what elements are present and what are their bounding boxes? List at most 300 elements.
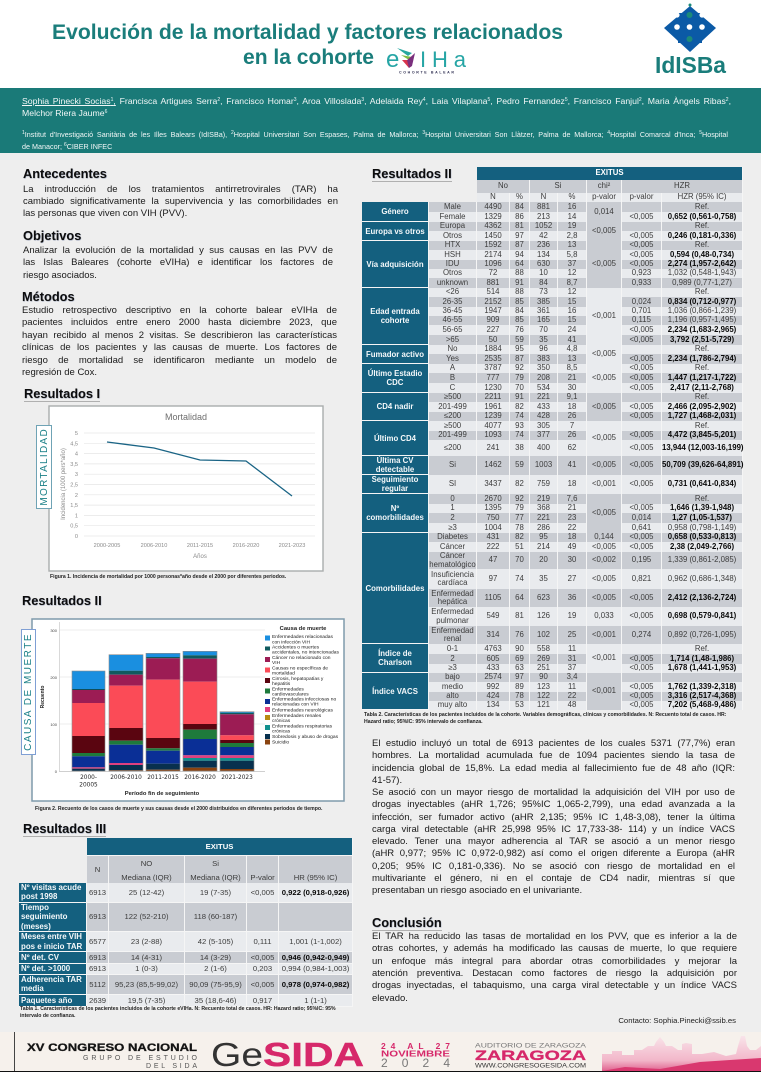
table: resultados II exitus: <0,005 [629,250,654,259]
text: objetivos: riesgo asociados. [23,270,97,281]
table: resultados II exitus: CD4 nadir [377,402,413,411]
x axis labels [94,543,305,560]
table: resultados II exitus: Female [440,212,466,221]
y axis ticks: 300 [50,628,58,633]
side label: mortalidad [36,425,52,509]
text: métodos: pacientes incluidos entre enero 2000 hasta diciembre 2023, que [22,317,337,328]
table: resultados II exitus: 1,036 (0,866-1,239) [668,306,736,315]
table: resultados II exitus: pulmonar [436,616,469,624]
table: resultados II exitus: 50,709 (39,626-64,891) [662,460,744,469]
y axis labels: 4,5 [70,441,78,447]
table: resultados II exitus: 2152 [484,297,502,306]
x axis labels: 2016-2020 [233,543,259,549]
table: resultados II exitus: 74 [515,411,524,420]
text: conclusión: drogas inyectadas, el tabaquismo, una carga viral detectable y un índice VACS [372,980,737,991]
table: resultados II exitus: p-valor [630,192,653,201]
table: resultados II exitus: Vía adquisición [366,260,424,268]
table: resultados II exitus: regular [382,484,408,493]
table: resultados II exitus: 82 [515,532,524,541]
table: resultados II exitus: 10 [539,268,548,277]
table: resultados III exitus: 6913 [89,964,106,973]
table: resultados II exitus: Europa [440,221,465,230]
table: resultados II exitus: 0-1 [447,644,458,653]
table: resultados III exitus: 2639 [89,996,106,1005]
table: resultados III exitus: 90,09 (75-95,9) [189,980,242,989]
table: resultados II exitus: 236 [537,240,550,249]
table: resultados III exitus: P-valor [250,873,275,882]
table: resultados II exitus: 222 [486,542,500,551]
text: métodos: regresión de Cox. [22,367,97,378]
table: resultados III exitus [19,838,352,1006]
table: resultados II exitus: 49 [568,542,576,551]
table: resultados II exitus: 1003 [535,460,552,469]
table: resultados II exitus: 165 [537,315,550,324]
table: resultados II exitus: 3787 [484,363,502,372]
table: resultados II exitus: <0,005 [629,430,654,439]
table: resultados II exitus: 549 [486,611,500,620]
table: resultados II exitus: 85 [515,315,524,324]
text: conclusión: un enfoque más integral para abordar otras comorbilidades y mejorar la [372,956,737,967]
table: resultados II exitus: <0,005 [629,240,654,249]
table: resultados II exitus: 13 [568,354,576,363]
congress date: 2024 [381,1056,450,1070]
authors and affiliations band [0,88,761,153]
table: resultados II exitus: 1 [450,503,455,512]
table: resultados II exitus: bajo [445,672,460,681]
table: resultados II exitus: 81 [515,221,524,230]
table: resultados II exitus: 881 [486,278,500,287]
congress name [27,1042,198,1070]
x axis labels: 20005 [79,782,98,788]
table: resultados III exitus: <0,005 [251,953,274,962]
bar: 2006-2010 [109,655,143,771]
table: resultados II exitus: <0,005 [629,373,654,382]
table: resultados II exitus: <0,005 [629,700,654,709]
y axis ticks: 0 [55,769,58,774]
table: resultados II exitus: 4763 [484,644,502,653]
y axis labels [70,431,78,540]
table: resultados II exitus: <0,005 [629,691,654,700]
table: resultados II exitus: 0,731 (0,641-0,834) [668,479,736,488]
table: resultados II exitus: 759 [537,479,550,488]
line chart: mortalidad [48,405,324,572]
table: resultados III exitus: Paquetes año [21,996,72,1005]
table: resultados III exitus: Adherencia TAR [21,975,82,984]
legend: Enfermedades neurológicas [272,708,333,714]
data line [107,442,292,496]
table: resultados III exitus: 25 (12-42) [129,888,164,897]
table: resultados II exitus: 27 [568,574,576,583]
table: resultados II exitus: 0,892 (0,726-1,095) [668,630,736,639]
table: resultados II exitus: 35 [539,335,548,344]
table: resultados II exitus: 50 [489,335,497,344]
table: resultados II exitus: 89 [515,682,524,691]
table: resultados II exitus: 18 [568,479,576,488]
contact: Contacto: Sophia.Pinecki@ssib.es [618,1016,736,1025]
table: resultados II exitus: 2 [450,654,455,663]
table: resultados II exitus: 47 [489,555,497,564]
table: resultados II exitus: ≤200 [444,411,461,420]
text: conclusión: otras cohortes, y además ha modificado las causas de muerte, lo que requiere [372,943,737,954]
table: resultados II exitus: 41 [568,460,576,469]
table: resultados II exitus: N [541,192,546,201]
x axis labels: Años [193,554,207,560]
table: resultados II exitus: 92 [515,363,524,372]
text: resultados: Se asoció con un mayor riesgo de mortalidad la adquisición del VIH por uso de [372,787,735,798]
congress venue: WWW.CONGRESOGESIDA.COM [475,1062,586,1070]
table: resultados II exitus: Yes [446,354,459,363]
table: resultados II exitus: <0,001 [592,311,616,320]
table: resultados II exitus: 305 [537,421,550,430]
table: resultados II exitus: 213 [537,212,550,221]
caption: tabla 2 [364,712,726,725]
table: resultados II exitus: 0,014 [632,513,651,522]
table: resultados II exitus: HSH [444,250,461,259]
table: resultados II exitus: 36 [568,593,576,602]
text: antecedentes: cambiado significativamente la supervivencia y las comorbilidades en [23,196,338,207]
table: resultados II exitus: Ref. [695,363,709,372]
table: resultados II exitus: HZR (95% IC) [678,192,727,201]
affiliations: 1Institut d'Investigació Sanitària de les Illes Balears (IdISBa), 2Hospital Universitari Son Espases, Palma de Mallorca; 3Hospital Universitari Son Llàtzer, Palma de Mallorca; 4Hospital Comarcal d'Inca; 5Hospital [22,130,728,139]
table: resultados III exitus: Si [212,859,219,868]
text: resultados: El estudio incluyó un total de 6913 pacientes de los cuales 5371 (77,7%) eran [372,738,735,749]
logo: IdISBa [655,4,726,78]
congress name: DEL SIDA [146,1063,197,1070]
table: resultados II exitus: 377 [537,430,550,439]
table: resultados II exitus: 95 [539,532,548,541]
table: resultados II exitus: 73 [539,287,548,296]
table: resultados III exitus: post 1998 [21,892,57,901]
table: resultados II exitus: 8,5 [567,363,577,372]
table: resultados II exitus: 0,933 [632,278,651,287]
table: resultados II exitus: 126 [537,611,550,620]
table: resultados II exitus: 241 [486,443,500,452]
table: resultados II exitus: 2211 [485,392,501,401]
table: resultados II exitus: <0,005 [592,349,616,358]
table: resultados II exitus: 85 [515,297,524,306]
table: resultados II exitus: 56-65 [443,325,462,334]
table: resultados II exitus: 221 [537,392,550,401]
table: resultados II exitus: 0 [450,494,455,503]
table: resultados II exitus: SI [449,479,456,488]
table: resultados II exitus: Ref. [695,644,709,653]
x axis labels: 2021-2023 [221,775,253,781]
table: resultados III exitus: 2 (1-6) [204,964,227,973]
table: resultados II exitus: No [448,344,457,353]
side label: causa de muerte: CAUSA DE MUERTE [23,633,34,751]
text: conclusión: elevado. [372,993,408,1004]
legend: mortalidad [272,670,295,676]
table: resultados II exitus: 87 [515,240,524,249]
table: resultados II exitus: 82 [515,479,524,488]
table: resultados II exitus: Edad entrada [370,307,420,316]
table: resultados II exitus: 102 [537,630,550,639]
table: resultados II exitus: <0,005 [592,402,616,411]
text: resultados: presentaban un riesgo asociado en el univariante. [372,885,582,896]
affiliations [22,130,728,151]
table: resultados II exitus: 2,417 (2,11-2,768) [670,383,734,392]
table: resultados II exitus: 0,834 (0,712-0,977) [668,297,736,306]
table: resultados II exitus: comorbilidades [366,513,424,522]
table: resultados II exitus: 1947 [484,306,502,315]
table: resultados II exitus [362,167,744,710]
congress date [381,1041,451,1070]
title: Evolución de la mortalidad y factores relacionados [52,21,563,44]
table: resultados II exitus: HZR [674,181,690,190]
table: resultados II exitus: 13,944 (12,003-16,199) [662,443,744,452]
table: resultados II exitus: 16 [568,202,576,211]
x axis labels [79,775,253,788]
table: resultados II exitus: 5,8 [567,250,577,259]
legend: accidentales, no intencionadas [272,650,339,656]
table: resultados II exitus: 2670 [484,494,502,503]
table: resultados II exitus: <0,001 [592,686,616,695]
table: resultados III exitus: 0,978 (0,974-0,982) [282,980,349,989]
table: resultados II exitus: 92 [515,494,524,503]
table: resultados II exitus: <0,005 [629,325,654,334]
legend: Enfermedades renales [272,713,322,719]
table: resultados II exitus: 4077 [484,421,502,430]
table: resultados II exitus: 514 [486,287,500,296]
table: resultados II exitus: 4362 [484,221,502,230]
heading: Métodos: Métodos [22,289,75,304]
table: resultados III exitus: 0,994 (0,984-1,003) [282,964,349,973]
table: resultados II exitus: 16 [568,306,576,315]
table: resultados II exitus: 21 [568,503,576,512]
stacked bar chart: causa de muerte: Período fin de seguimiento [125,791,200,797]
table: resultados II exitus: 2,234 (1,786-2,794) [668,354,736,363]
table: resultados II exitus: 2535 [484,354,502,363]
y axis labels: 3,5 [70,462,78,468]
legend: Enfermedades infecciosas no [272,696,336,702]
text: antecedentes [23,184,338,219]
table: resultados III exitus: <0,005 [251,888,274,897]
legend: Causas no específicas de [272,666,328,672]
table: resultados III exitus: (meses) [21,922,51,931]
table: resultados II exitus: 0,962 (0,686-1,348) [668,574,736,583]
table: resultados II exitus: 1052 [535,221,552,230]
table: resultados II exitus: <0,005 [629,402,654,411]
table: resultados II exitus: >65 [446,335,459,344]
table: resultados II exitus: unknown [437,278,468,287]
congress date: NOVIEMBRE [381,1050,451,1058]
authors: Sophia Pinecki Socias1, Francisca Artigues Serra2, Francisco Homar3, Aroa Villoslada3, Adelaida Rey4, Laia Vilaplana5, Pedro Fernandez5, Francisco Fanjul2, Maria Àngels Ribas2, [22,96,731,106]
table: resultados II exitus: <0,005 [629,443,654,452]
table: resultados II exitus: 227 [486,325,500,334]
heading: Resultados III: Resultados III [23,821,106,836]
table: resultados II exitus: 19 [568,611,576,620]
table: resultados II exitus: 78 [515,523,524,532]
table: resultados II exitus: EXITUS [595,168,624,177]
table: resultados III exitus: 1 (1-1) [304,996,327,1005]
table: resultados II exitus: 1462 [484,460,502,469]
table: resultados II exitus: 18 [568,532,576,541]
table: resultados II exitus: Si [555,181,561,190]
table: resultados II exitus: CDC [387,378,403,387]
table: resultados II exitus: 97 [489,574,497,583]
table: resultados II exitus: 1,727 (1,468-2,031) [668,411,736,420]
table: resultados II exitus: 1,339 (0,861-2,085) [668,555,736,564]
GeSIDA wordmark: SIDA [263,1036,364,1072]
table: resultados II exitus: Ref. [695,202,709,211]
table: resultados II exitus: 53 [515,700,524,709]
table: resultados II exitus: 534 [537,383,550,392]
heading: Conclusión: Conclusión [372,915,442,930]
table: resultados II exitus: 7 [570,421,574,430]
table: resultados II exitus: B [450,373,455,382]
table: resultados II exitus: 0,024 [632,297,651,306]
table: resultados II exitus: Charlson [378,658,412,667]
table: resultados II exitus: 14 [568,212,576,221]
table: resultados II exitus: 7,6 [567,494,577,503]
x axis labels: 2006-2010 [141,543,167,549]
table: resultados II exitus: 91 [515,278,524,287]
table: resultados II exitus: 18 [568,402,576,411]
table: resultados II exitus: 70 [515,383,524,392]
table: resultados II exitus: 4,8 [567,344,577,353]
congress name: GRUPO DE ESTUDIO [83,1055,198,1062]
table: resultados II exitus: Diabetes [437,532,468,541]
text: resultados: carga viral detectable (aHR 25,998 95% IC 17,733-38- 114) y un índice VACS [372,824,735,835]
table: resultados II exitus: <0,005 [629,354,654,363]
table: resultados II exitus: 88 [515,268,524,277]
title: en la cohorte [243,46,374,69]
table: resultados II exitus: 59 [515,335,524,344]
table: resultados III exitus: Meses entre VIH [21,932,82,941]
table: resultados III exitus: 1,001 (1-1,002) [289,937,342,946]
table: resultados II exitus: % [569,192,575,201]
table: resultados II exitus: 623 [537,593,550,602]
legend: con infección VIH [272,640,311,646]
text: antecedentes: La introducción de los tratamientos antirretrovirales (TAR) ha [23,184,338,195]
footer banner: GeSIDA congress [0,1032,761,1072]
table: resultados II exitus: 20 [539,555,548,564]
table: resultados II exitus: 42 [539,231,548,240]
GeSIDA wordmark [211,1036,364,1072]
table: resultados II exitus: 0,958 (0,798-1,149) [668,523,736,532]
text: resultados [372,738,736,896]
logo: IdISBa: IdISBa [655,52,726,78]
table: resultados II exitus: 69 [515,654,524,663]
table: resultados II exitus: Ref. [695,392,709,401]
table: resultados II exitus: 881 [537,202,550,211]
table: resultados II exitus: 8,7 [567,278,577,287]
x axis labels: 2006-2010 [110,775,142,781]
table: resultados II exitus: 350 [537,363,550,372]
table: resultados II exitus: 9,1 [567,392,577,401]
table: resultados II exitus: <26 [446,287,459,296]
text: objetivos: las Islas Baleares (cohorte eVIHa) e identificar los factores de [23,257,333,268]
table: resultados II exitus: N [490,192,496,201]
side label: causa de muerte [21,629,36,755]
table: resultados II exitus: 95 [515,344,524,353]
table: resultados II exitus: 4,472 (3,845-5,201) [668,430,736,439]
bar: 2011-2015 [146,653,180,771]
table: resultados II exitus: Último CD4 [374,434,416,442]
table: resultados II exitus: 31 [568,654,576,663]
table: resultados II exitus: p-valor [592,192,616,201]
y axis labels: 1 [75,513,78,519]
y axis ticks: 200 [50,675,58,680]
table: resultados II exitus: 3437 [484,479,502,488]
table: resultados II exitus: 1,27 (1,05-1,537) [672,513,732,522]
table: resultados II exitus: <0,005 [629,231,654,240]
table: resultados II exitus: <0,005 [629,654,654,663]
table: resultados II exitus: 1961 [484,402,502,411]
table: resultados II exitus: 87 [515,354,524,363]
table: resultados II exitus: 26-35 [443,297,462,306]
table: resultados II exitus: <0,005 [592,373,616,382]
table: resultados II exitus: 86 [515,212,524,221]
table: resultados II exitus: 383 [537,354,550,363]
table: resultados III exitus: HR (95% IC) [294,873,337,882]
table: resultados II exitus: Ref. [695,221,709,230]
table: resultados II exitus: <0,005 [629,212,654,221]
table: resultados II exitus: 76 [515,630,524,639]
legend: Enfermedades relacionadas [272,634,333,640]
table: resultados II exitus: 78 [515,691,524,700]
table: resultados II exitus: 1329 [484,212,502,221]
table: resultados II exitus: Género [381,207,409,216]
table: resultados II exitus: 22 [568,523,576,532]
x axis labels: 2021-2023 [279,543,305,549]
table: resultados III exitus: <0,005 [251,980,274,989]
heading: Antecedentes: Antecedentes [23,166,107,181]
table: resultados II exitus: <0,005 [629,611,654,620]
GeSIDA wordmark: Ge [211,1036,263,1072]
caption: tabla 1: Tabla 1. Características de los pacientes incluidos de la cohorte eVIHa. N: Recuento total de casos. HR: Hazard ratio; 95%IC: 95% [20,1006,336,1012]
skyline illustration [602,1036,761,1071]
table: resultados II exitus: 123 [537,682,550,691]
table: resultados II exitus: <0,005 [629,532,654,541]
table: resultados III exitus: 14 (4-31) [131,953,162,962]
table: resultados II exitus: 2,8 [567,231,577,240]
caption: tabla 1: intervalo de confianza. [20,1013,75,1019]
table: resultados II exitus: % [516,192,523,201]
table: resultados II exitus: Seguimiento [372,475,418,484]
table: resultados II exitus: 433 [537,402,550,411]
table: resultados II exitus: 208 [537,373,550,382]
table: resultados II exitus: <0,005 [629,335,654,344]
table: resultados II exitus: 2574 [484,672,502,681]
table: resultados II exitus: 777 [486,373,500,382]
heading: Resultados I: Resultados I [24,386,100,401]
y axis labels: 1,5 [70,503,78,509]
y axis labels: 2 [75,493,78,499]
table: resultados II exitus: 1,196 (0,957-1,495) [668,315,736,324]
table: resultados III exitus: 0,917 [253,996,272,1005]
table: resultados III exitus: 0,946 (0,942-0,949) [282,953,349,962]
table: resultados II exitus: Fumador activo [366,350,424,358]
table: resultados II exitus: 30 [568,383,576,392]
table: resultados II exitus: 51 [515,542,524,551]
table: resultados II exitus: 1239 [484,411,502,420]
table: resultados II exitus: 41 [568,335,576,344]
table: resultados II exitus: 88 [515,287,524,296]
table: resultados II exitus: <0,005 [629,411,654,420]
table: resultados II exitus: Enfermedad [431,589,474,598]
table: resultados II exitus: 134 [486,700,500,709]
table: resultados II exitus: 431 [486,532,500,541]
table: resultados II exitus: 22 [568,691,576,700]
text: métodos: hayan recibido al menos 2 visitas. Se describieron las características [22,330,337,341]
table: resultados III exitus: 19 (7-35) [200,888,231,897]
table: resultados II exitus: Otros [443,231,462,240]
table: resultados II exitus: Europa vs otros [365,226,425,236]
table: resultados II exitus: 81 [515,611,524,620]
table: resultados II exitus: 64 [515,593,524,602]
table: resultados II exitus: ≤200 [444,443,461,452]
